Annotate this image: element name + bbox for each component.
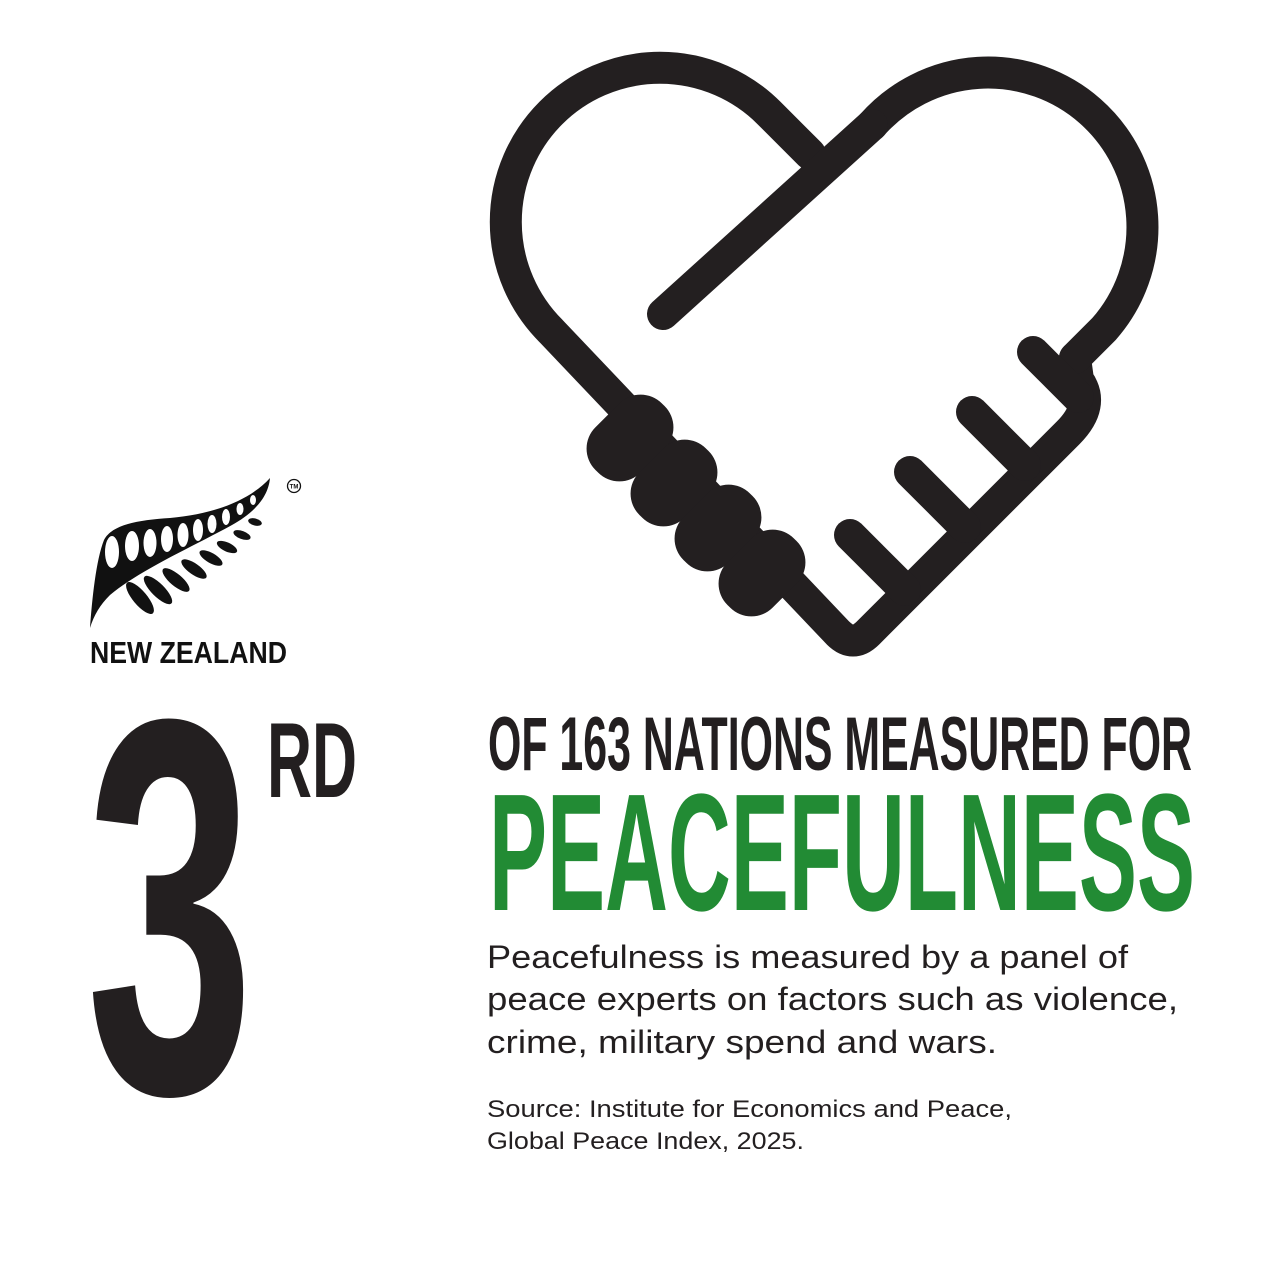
logo: New Zealand fern (90, 478, 300, 628)
body text: Peacefulness is measured by a panel of (487, 939, 1128, 975)
trademark symbol: TM (290, 484, 298, 490)
fingers (850, 352, 1078, 590)
body text: crime, military spend and wars. (487, 1024, 997, 1060)
source note: Global Peace Index, 2025. (487, 1128, 804, 1155)
left lobe and forearm contour (506, 68, 1085, 641)
rank suffix: RD (267, 700, 357, 820)
body text (487, 939, 1178, 1060)
diagonal hand line (663, 125, 872, 314)
trademark symbol (288, 480, 300, 492)
icon: heart handshake (506, 68, 1142, 641)
body text: peace experts on factors such as violence, (487, 981, 1178, 1017)
big rank number: 3 (86, 609, 254, 1206)
right lobe (872, 73, 1142, 358)
knuckles (574, 382, 818, 629)
source note: Source: Institute for Economics and Peace, (487, 1096, 1012, 1123)
logo text: NEW ZEALAND (90, 635, 287, 670)
source note (487, 1096, 1012, 1155)
